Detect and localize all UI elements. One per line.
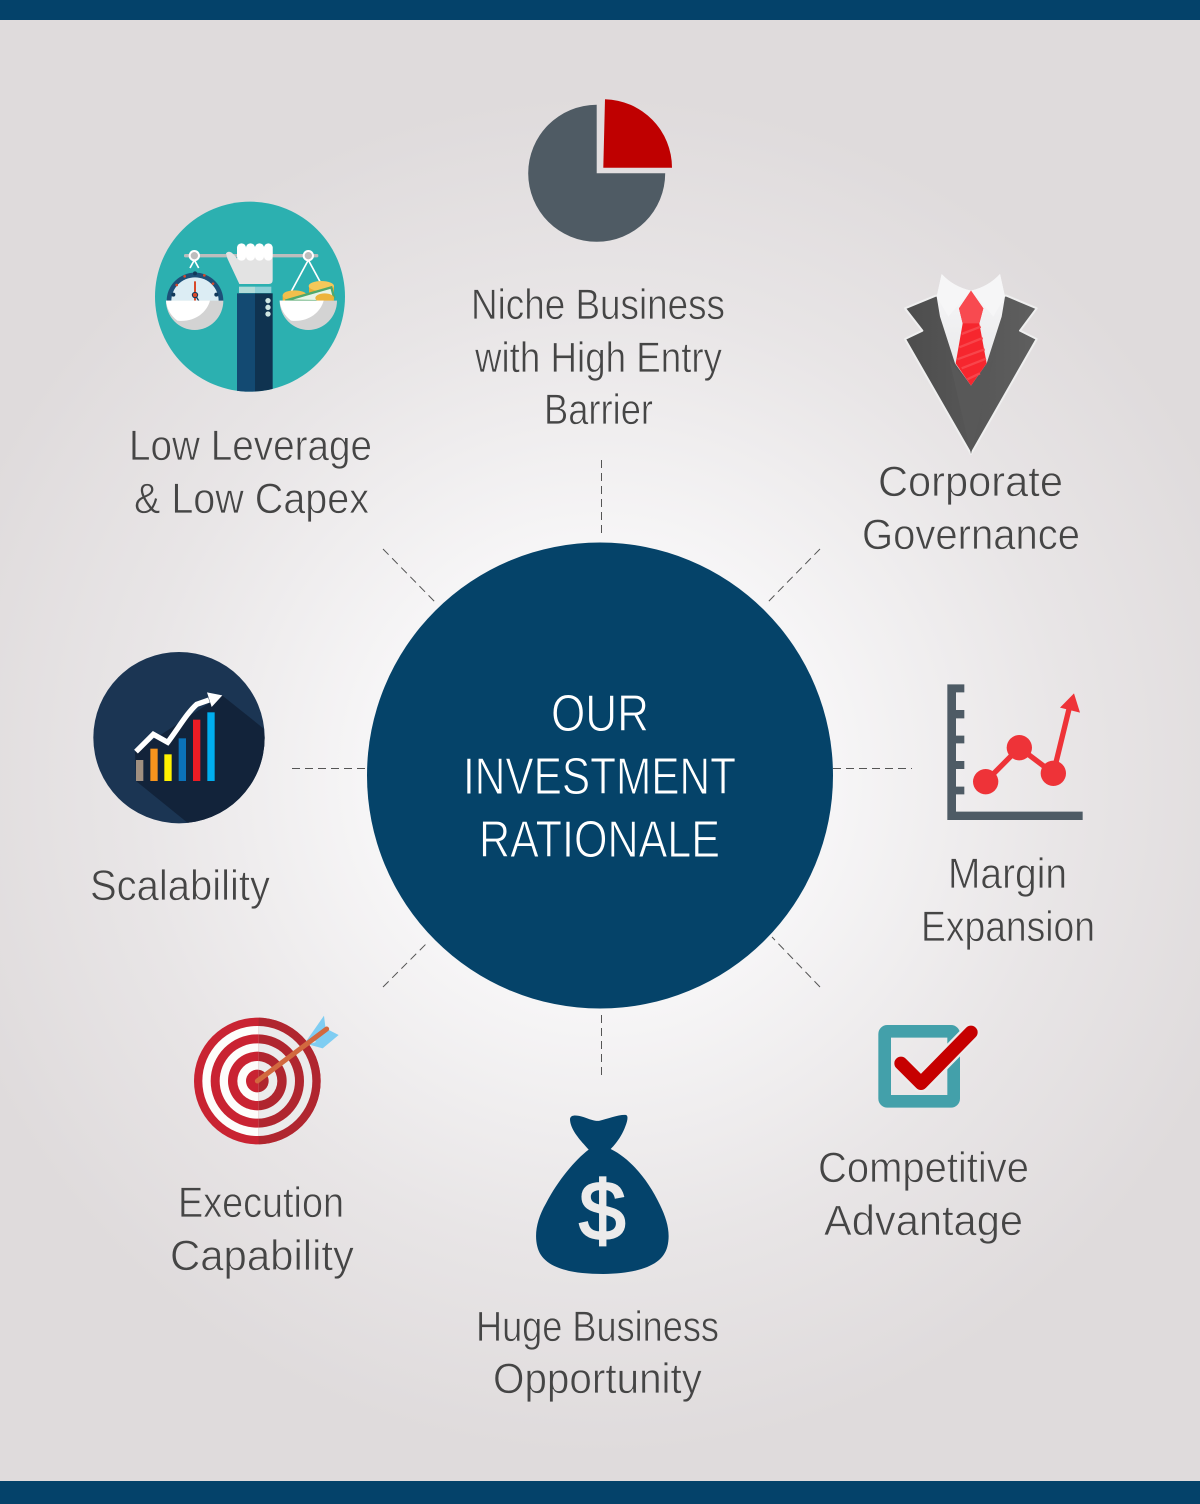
icon: growth chart in dark circle: [93, 652, 272, 823]
label: scalability: Scalability: [90, 862, 270, 910]
coins and banknote: [283, 295, 307, 301]
bottom bar: [0, 1481, 1200, 1504]
arm: [237, 287, 273, 393]
label: execution capability: [170, 1179, 354, 1280]
label: competitive advantage: Advantage: [824, 1197, 1023, 1245]
top bar: [0, 0, 1200, 20]
title: our investment rationale: OUR: [551, 685, 649, 743]
label: corporate governance: Corporate: [878, 458, 1063, 506]
label: low leverage and low capex: & Low Capex: [134, 475, 369, 523]
dollar sign: $: [579, 1165, 626, 1258]
label: execution capability: Capability: [170, 1232, 354, 1280]
icon: suit and red tie: [905, 274, 1037, 454]
label: huge business opportunity: Opportunity: [493, 1355, 702, 1403]
collar: [937, 274, 1005, 317]
title: our investment rationale: [463, 685, 736, 869]
icon: money bag: [536, 1115, 669, 1274]
icon: target with arrow: [194, 1016, 339, 1144]
label: low leverage and low capex: Low Leverage: [129, 422, 372, 470]
label: huge business opportunity: Huge Business: [476, 1303, 719, 1351]
beam: [184, 254, 318, 257]
clock: [167, 273, 223, 301]
label: margin expansion: Expansion: [921, 903, 1095, 951]
icon: rising line chart: [947, 684, 1083, 820]
label: execution capability: Execution: [178, 1179, 344, 1227]
label: niche business with high entry barrier: Barrier: [544, 386, 653, 434]
label: corporate governance: Governance: [862, 511, 1080, 559]
icon: balance scale with clock and money: [155, 202, 345, 393]
title: our investment rationale: INVESTMENT: [463, 748, 736, 806]
title: our investment rationale: RATIONALE: [479, 811, 720, 869]
central circle with title: [367, 542, 833, 1008]
strings: [190, 260, 330, 300]
label: huge business opportunity: [476, 1303, 719, 1403]
icon: pie chart: [528, 99, 672, 242]
label: margin expansion: Margin: [948, 850, 1067, 898]
label: low leverage and low capex: [129, 422, 372, 523]
label: competitive advantage: [818, 1144, 1029, 1245]
label: competitive advantage: Competitive: [818, 1144, 1029, 1192]
label: margin expansion: [921, 850, 1095, 951]
icon: check box: [885, 1031, 971, 1101]
label: niche business with high entry barrier: [471, 281, 725, 434]
tie: [956, 291, 987, 386]
jacket: [905, 296, 1037, 454]
label: niche business with high entry barrier: with High Entry: [474, 334, 722, 382]
label: corporate governance: [862, 458, 1080, 559]
shirt: [937, 274, 1005, 386]
label: niche business with high entry barrier: Niche Business: [471, 281, 725, 329]
pans: [166, 301, 223, 330]
